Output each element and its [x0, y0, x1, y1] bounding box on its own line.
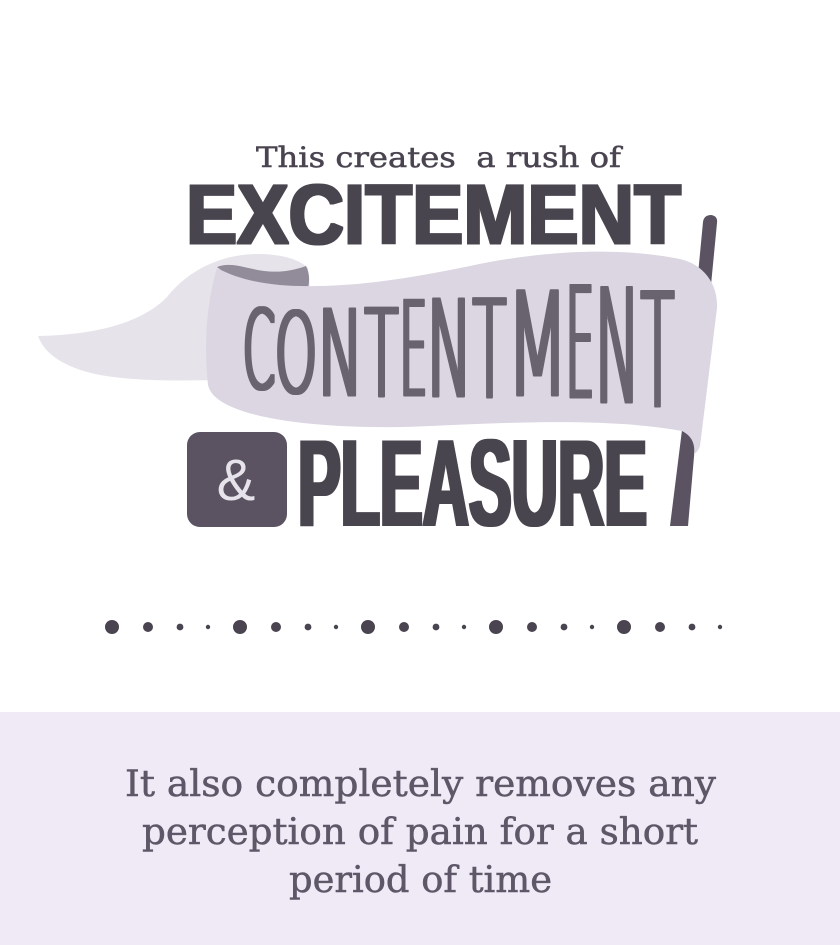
icon: flag pole top [697, 215, 717, 285]
banner text: contentment: M [507, 262, 568, 429]
banner: front [206, 252, 717, 454]
footer text: perception of pain for a short [142, 812, 699, 853]
footer text [125, 764, 717, 901]
intro text: This creates a rush of [256, 141, 624, 174]
banner text: contentment: E [566, 256, 594, 434]
banner text: contentment: E [400, 274, 427, 426]
banner text: contentment: N [318, 285, 363, 423]
dotted divider [105, 620, 722, 634]
footer text: period of time [289, 860, 552, 901]
footer text: It also completely removes any [125, 764, 717, 805]
banner text: contentment: O [275, 290, 317, 418]
banner text: contentment: N [595, 257, 640, 440]
banner: fold shadow [217, 265, 309, 292]
banner text: contentment: C [243, 289, 275, 414]
ampersand badge [187, 432, 287, 527]
banner text: contentment: T [473, 272, 506, 429]
text: T [641, 261, 674, 444]
icon: flag pole bottom [670, 430, 695, 526]
banner text: contentment [243, 256, 674, 444]
banner text: contentment: N [427, 274, 472, 428]
banner: back tail [38, 254, 310, 380]
footer panel [0, 712, 840, 945]
banner text: contentment: T [365, 286, 398, 425]
heading: excitement: EXCITEMENT [186, 168, 681, 262]
ampersand badge: & [217, 448, 255, 513]
